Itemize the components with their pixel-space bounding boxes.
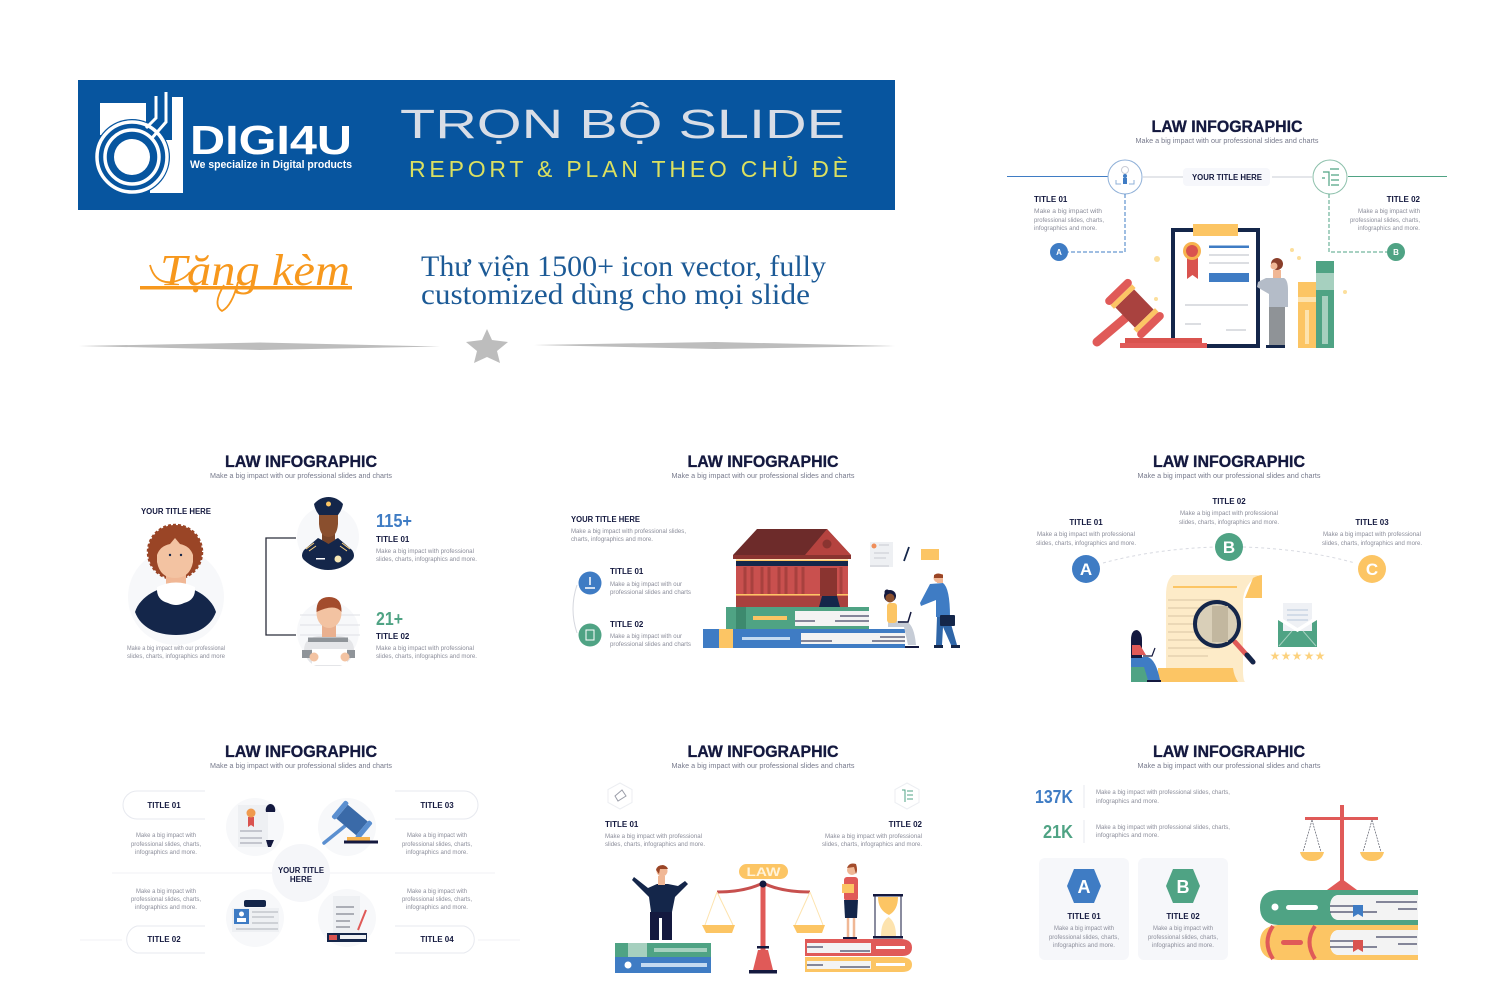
illustration: judge <box>128 525 224 645</box>
illustration: police officer <box>297 497 359 570</box>
judge description <box>127 646 226 660</box>
panel: slide 6 balance <box>605 742 923 974</box>
subheading: Make a big impact with our professional slides and charts <box>1136 138 1319 145</box>
pill: title 01: TITLE 01 <box>147 801 181 810</box>
illustration: man on books <box>615 865 711 973</box>
text: title 02 <box>1350 195 1421 232</box>
stat 137K: 137K <box>1035 787 1073 807</box>
badge B: B <box>1223 538 1235 557</box>
subheading: Make a big impact with our professional slides and charts <box>210 763 393 770</box>
illustration: scale on books <box>1300 805 1384 890</box>
text: title 01: Make a big impact with our <box>610 582 682 588</box>
text: stat 137K description <box>1096 790 1230 805</box>
card B: TITLE 02 <box>1166 912 1200 921</box>
illustration: standing books <box>1298 261 1334 348</box>
text: title 02: TITLE 02 <box>1212 497 1246 506</box>
text: stat 137K description: Make a big impact with professional slides, charts, <box>1096 790 1230 796</box>
icon: blue circle <box>578 572 602 594</box>
text: body 01: Make a big impact with <box>136 833 196 839</box>
text: title 02: Make a big impact with professional <box>376 646 474 652</box>
text: body 04 <box>402 889 472 911</box>
text: title 01: Make a big impact with <box>1034 209 1102 215</box>
stat 115+: 115+ <box>376 511 412 531</box>
text: body 01: infographics and more. <box>135 850 197 856</box>
text: title 01 <box>1036 518 1136 547</box>
text: body 02 <box>131 889 201 911</box>
text: body 04: Make a big impact with <box>407 889 467 895</box>
pill: title 04 <box>395 926 474 953</box>
heading: LAW INFOGRAPHIC <box>688 452 838 471</box>
text: title 01: professional slides, charts, <box>1034 218 1104 224</box>
badge A <box>1072 555 1100 583</box>
text: title 02: TITLE 02 <box>610 620 644 629</box>
text: title 02 <box>610 620 691 648</box>
text: your title: charts, infographics and more. <box>571 537 653 543</box>
text: title 01 <box>605 820 705 848</box>
illustration: prisoner <box>297 597 360 666</box>
text: stat 137K description: infographics and more. <box>1096 799 1159 805</box>
text: title 01: TITLE 01 <box>1069 518 1103 527</box>
illustration: woman with folder <box>842 864 858 940</box>
text: title 01: slides, charts, infographics and more. <box>376 557 477 563</box>
card A <box>1039 858 1129 960</box>
rating stars: ★ <box>1270 649 1280 663</box>
text: title 01: Make a big impact with professional <box>1037 532 1135 538</box>
subheading: Make a big impact with our professional slides and charts <box>672 763 855 770</box>
text: title 02: Make a big impact with <box>1358 209 1420 215</box>
rating stars: ★ <box>1304 649 1314 663</box>
heading: LAW INFOGRAPHIC <box>1153 452 1305 471</box>
text: body 02: professional slides, charts, <box>131 897 201 903</box>
subheading: Make a big impact with our professional slides and charts <box>1138 473 1321 480</box>
text: body 03: infographics and more. <box>406 850 468 856</box>
text: title 02 <box>822 820 923 848</box>
illustration: red and yellow books <box>805 939 912 972</box>
icons: document pen envelope <box>870 542 939 567</box>
text: title 01: Make a big impact with professional <box>605 834 702 840</box>
icon: hexagon right <box>895 783 919 809</box>
text: title 01 <box>610 567 691 596</box>
illustration: scroll with magnifier <box>1158 575 1262 682</box>
bonus description: Thư viện 1500+ icon vector, fully <box>421 250 826 283</box>
text: your title <box>571 515 686 543</box>
text: your title: Make a big impact with professional slides, <box>571 529 686 535</box>
text: stat 21K description: Make a big impact with professional slides, charts, <box>1096 825 1230 831</box>
text: body 02: infographics and more. <box>135 905 197 911</box>
star divider <box>79 329 895 363</box>
text: title 01: TITLE 01 <box>610 567 644 576</box>
rating stars: ★ <box>1281 649 1291 663</box>
illustration: man in grey shirt <box>1257 258 1288 348</box>
icon: list circle <box>1313 160 1347 194</box>
icon: certificate <box>226 798 284 856</box>
center title circle: HERE <box>290 875 313 884</box>
judge description: Make a big impact with our professional <box>127 646 225 652</box>
text: title 03: slides, charts, infographics and more. <box>1322 541 1422 547</box>
text: title 02 <box>1179 497 1279 526</box>
rating stars: ★ <box>1292 649 1302 663</box>
text: title 02: TITLE 02 <box>376 632 410 641</box>
heading: LAW INFOGRAPHIC <box>225 452 377 471</box>
pill: title 01 <box>123 791 205 819</box>
pill: title 04: TITLE 04 <box>420 935 454 944</box>
illustration: woman with laptop <box>1131 630 1161 682</box>
heading: LAW INFOGRAPHIC <box>688 742 838 761</box>
text: title 02: slides, charts, infographics and more. <box>1179 520 1279 526</box>
text: title 01: slides, charts, infographics and more. <box>605 842 705 848</box>
icon: blue gavel <box>318 798 378 856</box>
card B: professional slides, charts, <box>1148 935 1218 941</box>
bonus description: customized dùng cho mọi slide <box>421 278 810 311</box>
text: title 02: slides, charts, infographics and more. <box>376 654 477 660</box>
header banner <box>78 80 895 210</box>
badge C <box>1358 555 1386 583</box>
heading: LAW INFOGRAPHIC <box>1153 742 1305 761</box>
icon: hexagon left <box>608 783 632 809</box>
stat 21+: 21+ <box>376 609 403 629</box>
text: body 01 <box>131 833 201 856</box>
text: title 01: slides, charts, infographics and more. <box>1036 541 1136 547</box>
icon: green circle <box>578 624 602 646</box>
pill: title 02: TITLE 02 <box>147 935 181 944</box>
badge B <box>1215 533 1243 561</box>
rating stars <box>1270 649 1325 663</box>
panel: slide 5 four titles <box>80 742 520 953</box>
badge C: C <box>1366 560 1378 579</box>
illustration: stacked books <box>703 607 905 648</box>
illustration: green book <box>1260 890 1418 925</box>
logo wordmark: DIGI4U <box>190 117 352 163</box>
pill: title 03 <box>395 791 478 819</box>
text: body 03: professional slides, charts, <box>402 842 472 848</box>
judge description: slides, charts, infographics and more <box>127 654 226 660</box>
text: title 02: Make a big impact with professional <box>1180 511 1278 517</box>
illustration: courthouse <box>733 529 851 607</box>
stat 21K: 21K <box>1043 822 1073 842</box>
sparkles <box>1154 248 1347 301</box>
subheading: Make a big impact with our professional slides and charts <box>1138 763 1321 770</box>
card B <box>1138 858 1228 960</box>
heading: LAW INFOGRAPHIC <box>225 742 377 761</box>
text: title 03: Make a big impact with professional <box>1323 532 1421 538</box>
text: title 02: professional slides, charts, <box>1350 218 1420 224</box>
panel: slide 4 document review <box>1036 452 1422 682</box>
badge B <box>1387 243 1405 261</box>
text: body 03 <box>402 833 472 856</box>
badge A <box>1050 243 1068 261</box>
badge A: A <box>1056 248 1062 257</box>
panel: slide 7 stats and scale <box>1035 742 1418 960</box>
badge B: B <box>1393 248 1399 257</box>
panel: slide 2 people <box>127 452 477 666</box>
text: title 01: TITLE 01 <box>605 820 639 829</box>
card B: B <box>1176 877 1190 897</box>
panel: slide 1 certificate <box>1007 117 1447 348</box>
icon: Digi4U logo <box>94 92 183 195</box>
text: title 02: Make a big impact with professional <box>825 834 922 840</box>
card A: infographics and more. <box>1053 943 1115 949</box>
bonus script label: Tặng kèm <box>160 246 350 295</box>
text: title 01 <box>376 535 477 563</box>
label: YOUR TITLE HERE <box>141 507 212 516</box>
text: title 01: Make a big impact with professional <box>376 549 474 555</box>
illustration: yellow book <box>1260 925 1418 960</box>
panel: slide 3 courthouse <box>571 452 960 648</box>
subheading: Make a big impact with our professional slides and charts <box>210 473 393 480</box>
text: title 01: TITLE 01 <box>1034 195 1068 204</box>
bonus script label <box>140 246 352 311</box>
illustration: man with briefcase <box>920 574 960 648</box>
text: title 03: TITLE 03 <box>1355 518 1389 527</box>
illustration: seated woman <box>884 590 919 648</box>
illustration: gavel <box>1097 277 1207 348</box>
card B: infographics and more. <box>1152 943 1214 949</box>
text: title 02: Make a big impact with our <box>610 634 682 640</box>
title pill: YOUR TITLE HERE <box>1192 173 1263 182</box>
text: title 01: TITLE 01 <box>376 535 410 544</box>
text: body 01: professional slides, charts, <box>131 842 201 848</box>
icon: people circle <box>1108 160 1142 194</box>
bonus description <box>421 250 826 311</box>
text: body 04: infographics and more. <box>406 905 468 911</box>
center title circle: YOUR TITLE <box>278 866 325 875</box>
pill: title 03: TITLE 03 <box>420 801 454 810</box>
text: stat 21K description: infographics and more. <box>1096 833 1159 839</box>
banner heading: TRỌN BỘ SLIDE <box>400 101 845 147</box>
text: title 02: TITLE 02 <box>1387 195 1421 204</box>
text: title 03 <box>1322 518 1422 547</box>
icon: contract and books <box>318 889 376 947</box>
card A: Make a big impact with <box>1054 926 1114 932</box>
text: body 04: professional slides, charts, <box>402 897 472 903</box>
card A: TITLE 01 <box>1067 912 1101 921</box>
text: title 02: slides, charts, infographics and more. <box>822 842 922 848</box>
illustration: scale: LAW <box>746 865 781 879</box>
text: title 02 <box>376 632 477 660</box>
card A: professional slides, charts, <box>1049 935 1119 941</box>
rating stars: ★ <box>1315 649 1325 663</box>
card B: Make a big impact with <box>1153 926 1213 932</box>
subheading: Make a big impact with our professional slides and charts <box>672 473 855 480</box>
center title circle <box>272 844 330 902</box>
icon: id card <box>226 889 284 947</box>
text: stat 21K description <box>1096 825 1230 839</box>
banner subheading: REPORT & PLAN THEO CHỦ ĐÈ <box>409 154 848 182</box>
illustration: hourglass <box>873 894 903 938</box>
icon: envelope <box>1278 603 1317 647</box>
text: title 01: professional slides and charts <box>610 590 691 596</box>
text: title 02: TITLE 02 <box>889 820 923 829</box>
text: body 03: Make a big impact with <box>407 833 467 839</box>
badge A: A <box>1080 560 1092 579</box>
illustration: scale <box>702 864 825 974</box>
logo tagline: We specialize in Digital products <box>190 159 352 171</box>
text: title 01: infographics and more. <box>1034 226 1097 232</box>
illustration: certificate clipboard <box>1173 224 1258 346</box>
title pill <box>1183 168 1270 186</box>
card A: A <box>1078 877 1090 897</box>
text: title 02: infographics and more. <box>1358 226 1420 232</box>
heading: LAW INFOGRAPHIC <box>1152 117 1302 136</box>
text: body 02: Make a big impact with <box>136 889 196 895</box>
pill: title 02 <box>127 926 205 953</box>
text: title 02: professional slides and charts <box>610 642 691 648</box>
text: title 01 <box>1034 195 1104 232</box>
text: your title: YOUR TITLE HERE <box>571 515 641 524</box>
